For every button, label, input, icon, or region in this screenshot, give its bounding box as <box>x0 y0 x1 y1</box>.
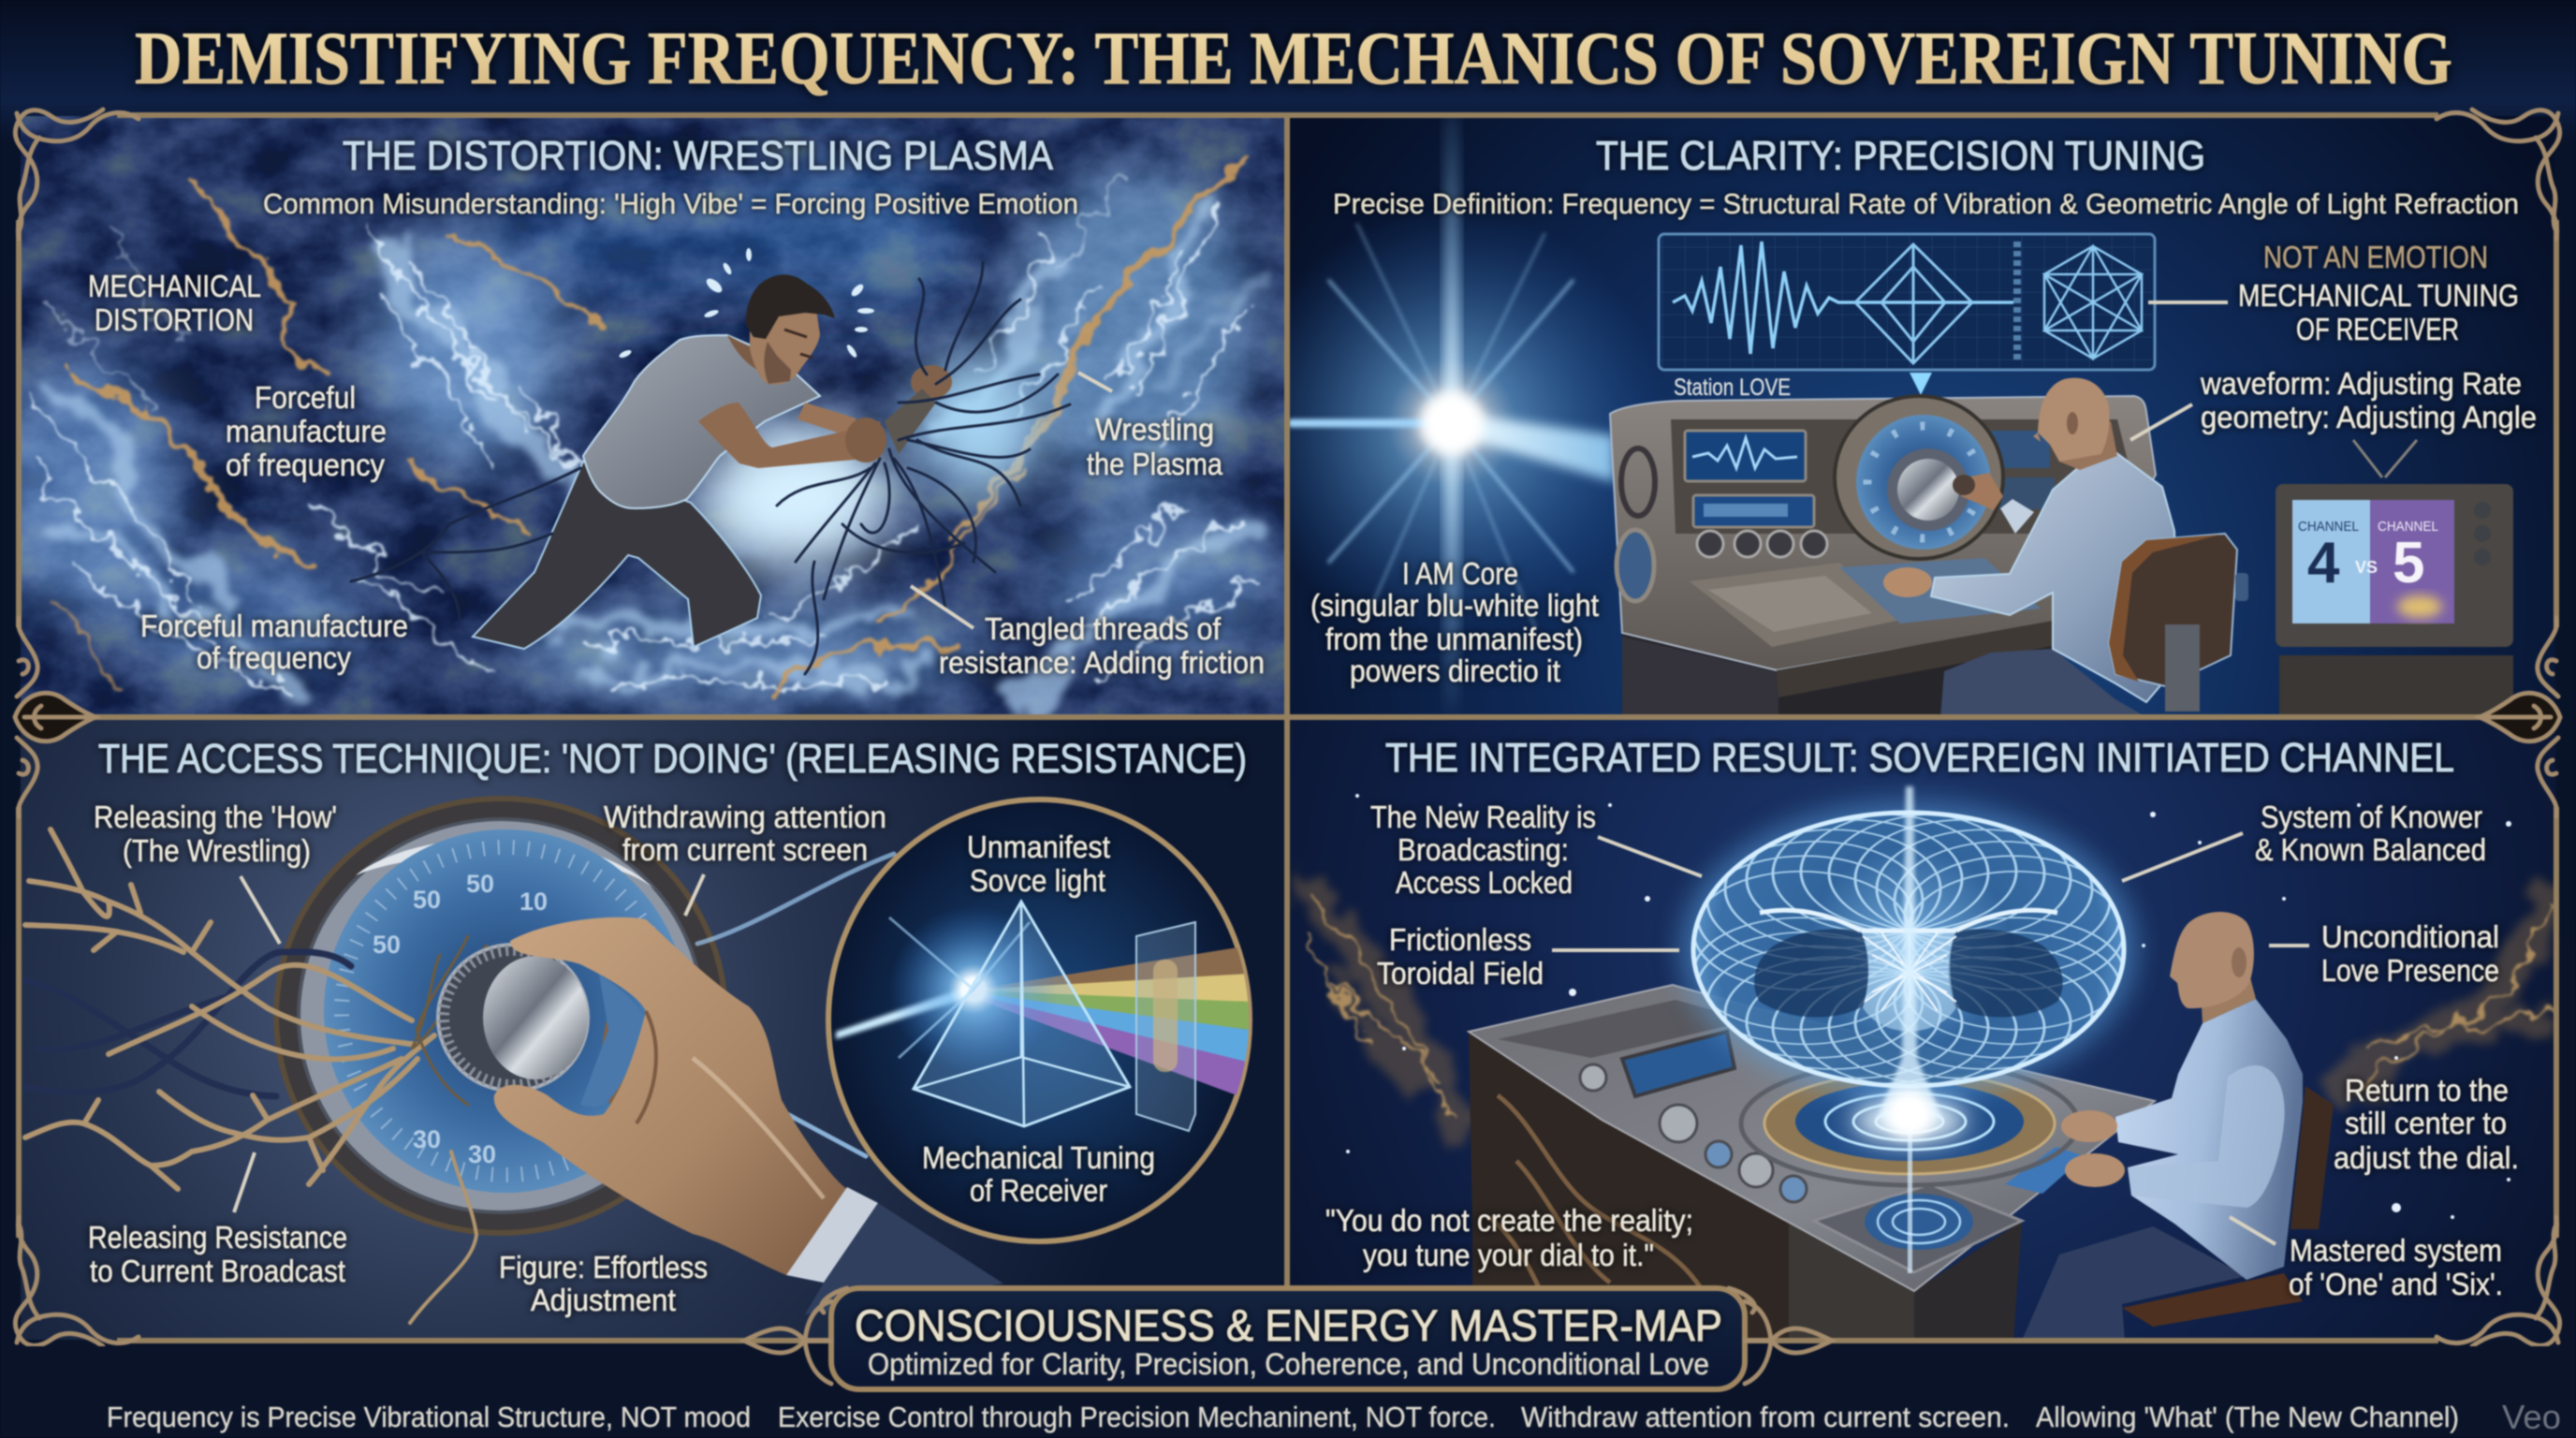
operator seated at console <box>1883 378 2248 717</box>
chair <box>2109 534 2248 712</box>
footer principles: Withdraw attention from current screen. <box>1521 1401 2010 1433</box>
thorny resistance tangles <box>25 829 487 1323</box>
corner ornament: bottom left <box>15 1217 139 1346</box>
panel: the access technique <box>19 717 1288 1343</box>
label: system of knower and known: System of Knower <box>2261 800 2482 834</box>
label: forceful manufacture upper <box>226 380 387 482</box>
television: channel 4 vs 5: 5 <box>2393 531 2424 595</box>
panel: the clarity <box>1237 114 2557 719</box>
label: withdrawing attention <box>604 800 886 867</box>
label: releasing resistance: to Current Broadcast <box>90 1254 345 1288</box>
label: tangled threads: Tangled threads of <box>985 611 1222 646</box>
tuning dial: 30 <box>413 1125 441 1153</box>
hand adjusting knob <box>494 917 1003 1314</box>
label: unconditional love presence: Love Presence <box>2321 953 2499 988</box>
label: unmanifest source light: Sovce light <box>970 863 1105 898</box>
seated sovereign figure <box>2022 912 2334 1341</box>
tuning dial: 10 <box>520 888 548 916</box>
gold nebula clouds <box>1310 880 2551 1128</box>
label: effortless adjustment <box>499 1250 708 1317</box>
side ornament: middle left <box>15 618 95 816</box>
connector: toroidal field <box>1552 948 1679 952</box>
inset circle: prism refraction <box>828 800 1250 1241</box>
label: waveform and geometry: geometry: Adjusting Angle <box>2201 400 2537 434</box>
label: return to still center <box>2334 1073 2519 1175</box>
label: wrestling the plasma: the Plasma <box>1087 447 1223 481</box>
quote: you tune your dial: "You do not create the reality; <box>1325 1203 1693 1238</box>
label: station love: Station LOVE <box>1674 374 1791 401</box>
label: releasing the how: (The Wrestling) <box>123 833 311 868</box>
label: releasing resistance <box>88 1220 347 1288</box>
label: mastered system: Mastered system <box>2290 1233 2502 1268</box>
label: wrestling the plasma: Wrestling <box>1095 412 1214 447</box>
banner title: CONSCIOUSNESS & ENERGY MASTER-MAP <box>855 1300 1722 1350</box>
television: channel 4 vs 5: 4 <box>2307 531 2340 595</box>
footer principles: Exercise Control through Precision Mechaninent, NOT force. <box>778 1401 1496 1433</box>
label: mechanical distortion <box>88 269 261 337</box>
side ornament: middle right <box>2480 618 2560 816</box>
label: I AM core <box>1310 556 1599 688</box>
connector: love presence <box>2269 944 2309 947</box>
quote: you tune your dial <box>1325 1203 1693 1272</box>
large tuning dial <box>1835 396 2003 559</box>
label: unmanifest source light <box>967 829 1110 898</box>
label: new reality broadcasting <box>1370 800 1596 900</box>
background <box>1288 717 2557 1343</box>
label: return to still center: Return to the <box>2345 1073 2509 1108</box>
tuning dial: 50 <box>373 931 401 959</box>
glowing dial ring <box>1741 1062 2078 1185</box>
television: channel 4 vs 5 <box>2276 440 2513 717</box>
sweat marks <box>618 248 874 360</box>
tuning console <box>1610 396 2156 717</box>
label: releasing resistance: Releasing Resistance <box>88 1220 347 1255</box>
banner subtitle: Optimized for Clarity, Precision, Coherence, and Unconditional Love <box>868 1347 1709 1381</box>
label: mechanical tuning of receiver: of Receiver <box>970 1173 1107 1208</box>
panel: the integrated result <box>1288 717 2557 1343</box>
television: channel 4 vs 5: VS <box>2355 558 2378 577</box>
background <box>19 717 1288 1343</box>
label: releasing the how: Releasing the 'How' <box>94 800 337 834</box>
label: new reality broadcasting: Access Locked <box>1396 865 1573 900</box>
label: return to still center: still center to <box>2345 1106 2507 1140</box>
corner ornament: top left <box>15 110 139 239</box>
panel: the distortion <box>0 114 1288 719</box>
label: withdrawing attention: from current screen <box>622 832 868 867</box>
connector: man to waveform text <box>2130 404 2192 440</box>
corner ornament: bottom right <box>2437 1217 2560 1346</box>
subheading: precise definition: Precise Definition: Frequency = Structural Rate of Vibration & Geometric Angle of Light Refraction <box>1333 187 2519 220</box>
label: system of knower and known: & Known Balanced <box>2255 832 2486 867</box>
label: mechanical distortion: MECHANICAL <box>88 269 261 303</box>
label: not an emotion: MECHANICAL TUNING <box>2238 278 2519 313</box>
label: unconditional love presence <box>2321 919 2499 988</box>
connector: wrestling the plasma <box>1078 373 1112 391</box>
label: new reality broadcasting: The New Reality is <box>1370 800 1596 834</box>
heading: the distortion: THE DISTORTION: WRESTLING PLASMA <box>343 133 1054 179</box>
banner ornament: left <box>744 1288 847 1384</box>
label: I AM core: powers directio it <box>1350 653 1560 688</box>
label: forceful manufacture upper: of frequency <box>226 448 385 482</box>
label: system of knower and known <box>2255 800 2486 867</box>
label: waveform and geometry: waveform: Adjusting Rate <box>2200 366 2522 401</box>
label: not an emotion: NOT AN EMOTION <box>2263 240 2488 274</box>
corner ornament: top right <box>2437 110 2560 239</box>
tuning dial: 50 <box>466 870 494 898</box>
label: return to still center: adjust the dial. <box>2334 1140 2519 1175</box>
quote: you tune your dial: you tune your dial to it." <box>1363 1238 1654 1272</box>
label: effortless adjustment: Figure: Effortless <box>499 1250 708 1284</box>
label: mechanical tuning of receiver: Mechanical Tuning <box>922 1140 1155 1175</box>
footer backdrop <box>0 1346 2576 1438</box>
label: forceful manufacture upper: Forceful <box>255 380 356 415</box>
heading: the integrated result: THE INTEGRATED RESULT: SOVEREIGN INITIATED CHANNEL <box>1385 735 2454 781</box>
label: new reality broadcasting: Broadcasting: <box>1398 832 1569 867</box>
heading: the access technique: THE ACCESS TECHNIQUE: 'NOT DOING' (RELEASING RESISTANCE) <box>98 736 1247 782</box>
label: forceful manufacture upper: manufacture <box>226 414 387 448</box>
label: releasing the how <box>94 800 337 868</box>
label: frictionless toroidal field: Toroidal Field <box>1377 956 1544 990</box>
label: tangled threads <box>939 611 1265 680</box>
label: frictionless toroidal field: Frictionless <box>1389 922 1531 957</box>
label: mechanical distortion: DISTORTION <box>95 302 254 337</box>
label: withdrawing attention: Withdrawing attention <box>604 800 886 834</box>
frictionless toroidal field <box>1680 801 2137 1097</box>
connector: releasing the how <box>241 876 280 944</box>
label: forceful manufacture lower: Forceful manufacture <box>140 609 408 643</box>
label: I AM core: from the unmanifest) <box>1325 622 1583 656</box>
connector: knower and known <box>2122 833 2243 881</box>
television: channel 4 vs 5: CHANNEL <box>2298 519 2359 535</box>
label: forceful manufacture lower: of frequency <box>197 640 351 675</box>
label: tangled threads: resistance: Adding friction <box>939 645 1265 680</box>
footer principles: Allowing 'What' (The New Channel) <box>2036 1401 2459 1433</box>
label: forceful manufacture lower <box>140 609 408 675</box>
banner ornament: right <box>1729 1288 1832 1384</box>
label: wrestling the plasma <box>1087 412 1223 481</box>
connector: releasing resistance <box>234 1152 255 1212</box>
label: waveform and geometry <box>2200 366 2537 434</box>
label: I AM core: I AM Core <box>1402 556 1518 591</box>
connector: withdrawing attention <box>685 874 704 916</box>
label: effortless adjustment: Adjustment <box>531 1283 676 1317</box>
tangled threads of resistance <box>351 262 1070 674</box>
figure: man wrestling plasma <box>473 274 952 649</box>
watermark: Veo <box>2502 1398 2561 1436</box>
hologram waveform and geometry display <box>1659 234 2155 395</box>
vertical energy beam <box>1877 786 1942 1273</box>
footer principles: Frequency is Precise Vibrational Structure, NOT mood <box>107 1401 751 1433</box>
tuning dial: 30 <box>468 1140 496 1168</box>
label: unconditional love presence: Unconditional <box>2321 919 2499 954</box>
metal knob <box>438 945 588 1091</box>
stars <box>1346 794 2511 1219</box>
label: unmanifest source light: Unmanifest <box>967 829 1110 864</box>
label: mechanical tuning of receiver <box>922 1140 1155 1208</box>
banner: consciousness and energy master-map <box>744 1288 1832 1389</box>
tuning dial <box>276 799 725 1233</box>
light streaks from hand to inset <box>694 854 894 1156</box>
connector: new reality <box>1598 837 1702 876</box>
label: mastered system: of 'One' and 'Six'. <box>2289 1267 2503 1301</box>
label: frictionless toroidal field <box>1377 922 1544 990</box>
background <box>1288 114 2557 719</box>
connector: tangled threads <box>911 586 973 628</box>
heading: the clarity: THE CLARITY: PRECISION TUNING <box>1596 133 2205 179</box>
subheading: common misunderstanding: Common Misunderstanding: 'High Vibe' = Forcing Positive Emotion <box>263 187 1078 220</box>
label: mastered system <box>2289 1233 2503 1301</box>
connector: mastered system <box>2230 1217 2276 1244</box>
television: channel 4 vs 5: CHANNEL <box>2378 519 2438 535</box>
label: not an emotion <box>2238 240 2519 346</box>
storm background <box>0 114 1288 719</box>
tuning dial: 50 <box>413 886 441 914</box>
footer principles <box>107 1401 2459 1433</box>
label: I AM core: (singular blu-white light <box>1310 588 1599 623</box>
control console <box>1469 985 2155 1341</box>
I AM core light star <box>1237 114 1667 713</box>
label: not an emotion: OF RECEIVER <box>2296 312 2459 346</box>
connector: hologram to text <box>2148 301 2228 304</box>
